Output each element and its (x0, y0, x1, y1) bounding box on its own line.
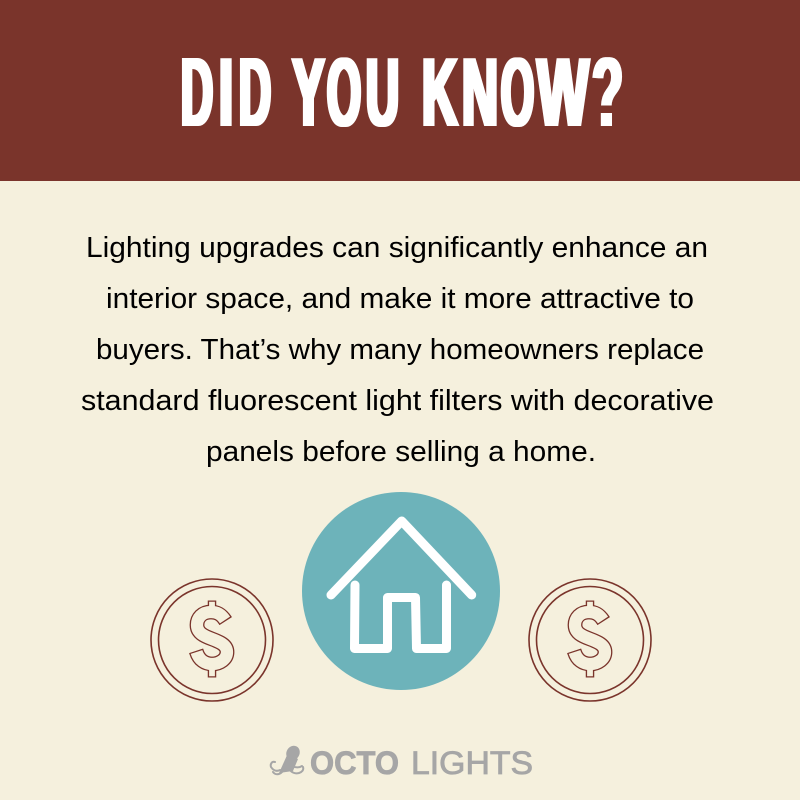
body text block: panels before selling a home. (206, 436, 596, 468)
body text block: standard fluorescent light filters with decorative (81, 385, 714, 417)
title: W (537, 37, 589, 147)
title: I (219, 37, 233, 147)
body text block: buyers. That’s why many homeowners replace (96, 334, 704, 366)
icon: right dollar coin (529, 579, 651, 701)
logo: Octo Lights (271, 743, 533, 781)
title: O (501, 37, 534, 147)
header banner (0, 0, 800, 181)
logo wordmark: OCTO (310, 745, 399, 781)
title: ? (592, 37, 623, 147)
title: O (327, 37, 361, 147)
title: U (366, 37, 399, 147)
icon: octopus (271, 743, 303, 774)
title: D (181, 37, 213, 147)
title: N (462, 37, 498, 147)
body text block: Lighting upgrades can significantly enhance an (86, 232, 708, 264)
body text block: interior space, and make it more attractive to (106, 283, 694, 315)
logo wordmark: LIGHTS (411, 745, 533, 781)
title: Y (292, 37, 324, 147)
title: K (422, 37, 458, 147)
icon: left dollar coin (151, 579, 273, 701)
title: D (239, 37, 271, 147)
body text block (81, 232, 714, 468)
icon: house in teal circle (302, 492, 500, 690)
